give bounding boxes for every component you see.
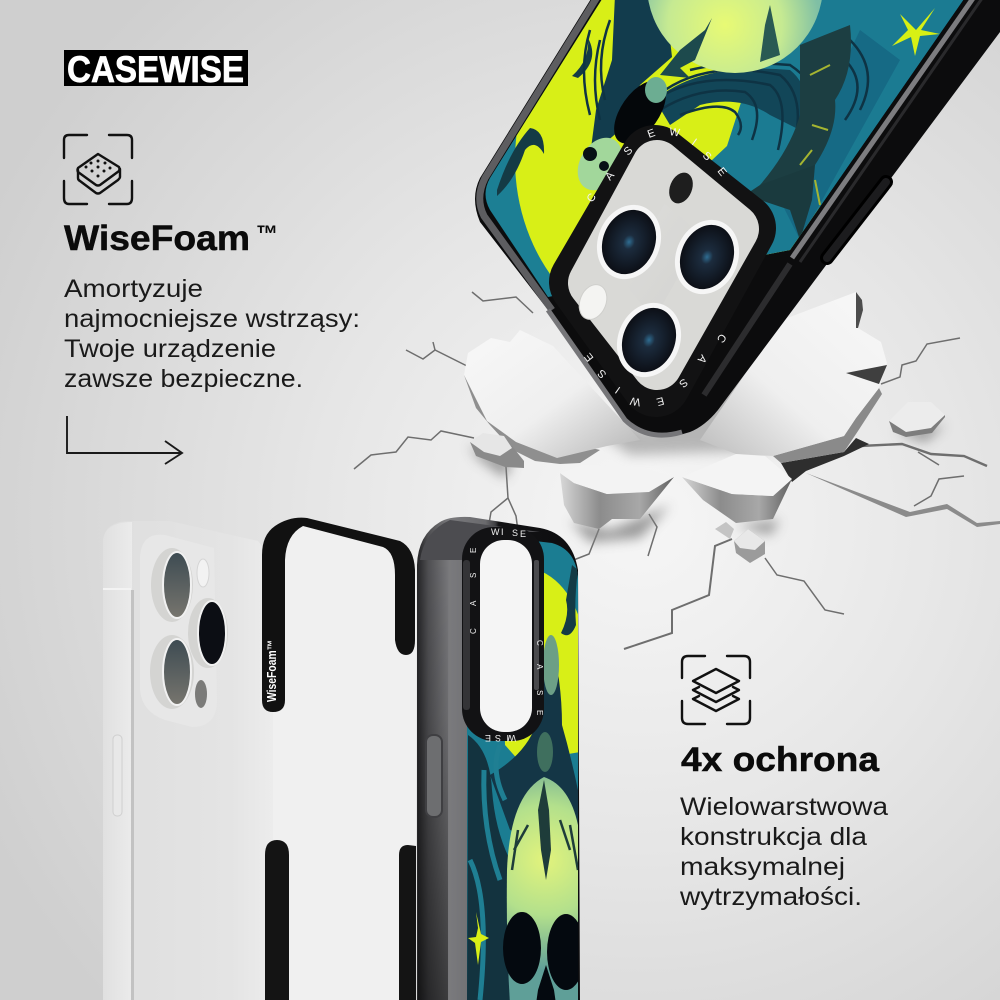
dark right horn [561, 565, 578, 635]
case outer shell [475, 0, 1000, 436]
flash [197, 559, 209, 587]
crater: cracked wall [354, 292, 1000, 649]
text block: WiseFoam description: zawsze bezpieczne. [64, 365, 303, 393]
flake: bottom left side [560, 473, 674, 529]
ornament [660, 18, 712, 78]
darker blue [780, 30, 900, 240]
figure head [543, 635, 559, 695]
large ball [647, 0, 823, 73]
lens 3 [606, 293, 692, 387]
ring top text: WISE [491, 527, 526, 539]
camera plateau [140, 535, 217, 727]
text block: WiseFoam description [64, 275, 360, 393]
dark fissure [781, 438, 869, 482]
lens 1 [586, 195, 672, 289]
white phone [103, 521, 273, 1000]
side button [113, 735, 122, 816]
leg highlights [800, 65, 830, 205]
top bevel [420, 520, 540, 560]
star [892, 8, 940, 56]
figure chest [537, 732, 553, 772]
case frame [417, 517, 580, 1000]
skull face [578, 138, 621, 190]
lower grey rim [548, 310, 682, 435]
shard tip [856, 292, 863, 328]
skull ornament [538, 780, 551, 880]
foam strip: lower left [265, 840, 289, 1000]
left tentacles [467, 735, 510, 1000]
artwork [486, 0, 964, 297]
lens top [163, 552, 191, 618]
foam label: WiseFoam™ [265, 640, 279, 702]
camera ring highlight [463, 560, 470, 710]
bone leg [760, 25, 851, 185]
slab shard: dark notch [846, 365, 887, 384]
text block: 4x ochrona description: maksymalnej [680, 853, 845, 881]
text block: 4x ochrona description: konstrukcja dla [680, 823, 867, 851]
inner mouth [645, 77, 667, 103]
skull eyes [583, 147, 609, 171]
text block: 4x ochrona description: wytrzymałości. [679, 883, 862, 911]
crack lines [354, 292, 987, 649]
slab: left [464, 330, 640, 458]
ring left text: CASE [469, 548, 478, 634]
glossy rim 2 [800, 0, 985, 262]
crack wedge: right [806, 473, 1000, 527]
ring right text: CASE [535, 640, 544, 715]
camera surrounds [150, 548, 228, 709]
camera island plate [593, 165, 734, 365]
flash white [574, 280, 612, 324]
insert sheet [273, 524, 416, 1000]
moon [515, 0, 820, 274]
body [103, 521, 273, 1000]
camera ring [462, 527, 544, 741]
camera opening [480, 540, 532, 732]
phone: side case with art [417, 517, 585, 1000]
soft shadows [468, 425, 945, 542]
bottom small chunks [715, 522, 765, 563]
slab: right [700, 292, 887, 456]
lens mid [198, 601, 226, 665]
big skull [507, 777, 582, 1000]
blue area right [712, 0, 964, 255]
glossy rim [792, 0, 976, 258]
ring bottom text: WISE [485, 733, 516, 743]
left translucent rim [480, 0, 599, 310]
hair strokes [584, 20, 868, 150]
hair strands dark fill [662, 68, 800, 128]
camera ring right highlight [534, 560, 539, 690]
skull side marks [512, 820, 578, 870]
artwork [465, 530, 585, 1000]
right chunk [889, 402, 945, 437]
side button [426, 735, 442, 817]
frame darkening toward bottom [418, 560, 448, 1000]
text block: WiseFoam description: Amortyzuje [64, 275, 203, 303]
heading: WiseFoam: ™ [256, 221, 278, 248]
flake: bottom left [560, 465, 674, 494]
slab: right side face [773, 388, 882, 463]
heading: 4x ochrona: 4x ochrona [681, 741, 880, 779]
icon: foam pad in focus brackets [64, 135, 132, 204]
star [468, 912, 489, 965]
small sensor [195, 680, 207, 708]
foam strip: top frame [262, 518, 415, 712]
mouth [614, 82, 666, 144]
top shine [103, 588, 131, 590]
text block: 4x ochrona description [679, 793, 888, 911]
claw toes [751, 165, 815, 237]
flake: bottom right side [682, 477, 792, 523]
foam strip: lower right [399, 845, 416, 1000]
ring brand text: top: CASEWISE [585, 126, 729, 205]
logo: CASEWISE: CASEWISE [67, 49, 244, 90]
lower soft rim [704, 264, 790, 395]
left small chunks [470, 433, 524, 468]
edge line [131, 590, 134, 1000]
side button [827, 182, 886, 258]
teal gaps [470, 745, 505, 1000]
lens bottom [163, 639, 191, 705]
phone: tilted case with camera [470, 0, 1000, 436]
text block: WiseFoam description: Twoje urządzenie [64, 335, 276, 363]
text block: 4x ochrona description: Wielowarstwowa [680, 793, 888, 821]
slab: left side face [464, 375, 600, 464]
ring brand text: bottom: CASEWISE [582, 331, 728, 408]
text block: WiseFoam description: najmocniejsze wstrząsy: [64, 305, 360, 333]
moon [504, 572, 578, 756]
arrow [67, 416, 182, 464]
foam insert panel [262, 518, 416, 1000]
heading: WiseFoam: WiseFoam [64, 219, 250, 258]
lens 2 [664, 210, 750, 304]
flake: bottom right [682, 454, 792, 496]
eye sockets [503, 912, 585, 990]
figure hair [490, 635, 578, 830]
camera island ring [584, 160, 741, 382]
nose [536, 965, 556, 1000]
side band [103, 522, 132, 1000]
flash hole [665, 169, 697, 207]
icon: stacked layers in focus brackets [682, 656, 750, 724]
shade behind phone [560, 340, 830, 455]
feather [760, 5, 780, 62]
hair mass [590, 0, 672, 156]
horns [497, 128, 544, 196]
